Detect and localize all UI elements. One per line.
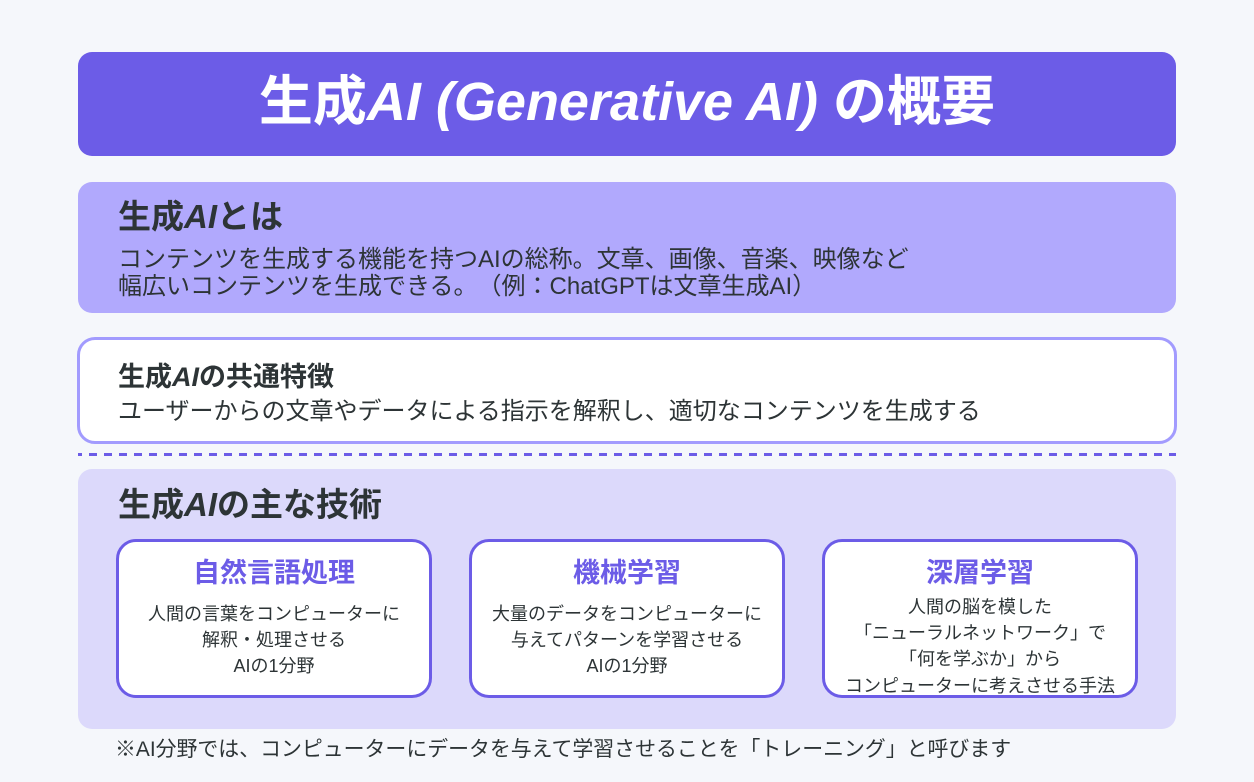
card text: 大量のデータをコンピューターに [492,604,762,624]
card heading: 機械学習 [573,558,681,588]
card text: 解釈・処理させる [202,630,346,650]
footnote: ※AI分野では、コンピューターにデータを与えて学習させることを「トレーニング」と呼びます [115,738,1011,761]
panel: common features [77,337,1177,444]
text block: definition: 幅広いコンテンツを生成できる。（例：ChatGPTは文章生成AI） [118,273,816,300]
card: natural language processing [116,539,432,698]
text block: common features: ユーザーからの文章やデータによる指示を解釈し、適切なコンテンツを生成する [118,398,981,425]
card text: 与えてパターンを学習させる [511,630,743,650]
card text: 人間の言葉をコンピューターに [148,604,400,624]
heading: common features: 生成AIの共通特徴 [118,362,334,392]
card text [148,604,400,676]
card text [492,604,762,676]
card heading: 自然言語処理 [193,558,355,588]
card text: AIの1分野 [586,656,668,676]
card text: 「何を学ぶか」から [899,649,1061,669]
title: 生成AI (Generative AI) の概要 [259,72,995,132]
heading: main technologies: 生成AIの主な技術 [118,486,382,523]
card text: AIの1分野 [233,656,315,676]
card heading: 深層学習 [926,558,1034,588]
title banner [78,52,1176,156]
card: deep learning [822,539,1138,698]
heading: what is generative AI: 生成AIとは [118,198,283,235]
panel: what is generative AI [78,182,1176,313]
card text: コンピューターに考えさせる手法 [845,676,1115,696]
card text [845,597,1115,696]
card text: 人間の脳を模した [908,597,1052,617]
panel: main technologies [78,469,1176,729]
card: machine learning [469,539,785,698]
card text: 「ニューラルネットワーク」で [854,623,1106,643]
text block: definition [118,246,909,300]
text block: definition: コンテンツを生成する機能を持つAIの総称。文章、画像、音楽、映像など [118,246,909,273]
